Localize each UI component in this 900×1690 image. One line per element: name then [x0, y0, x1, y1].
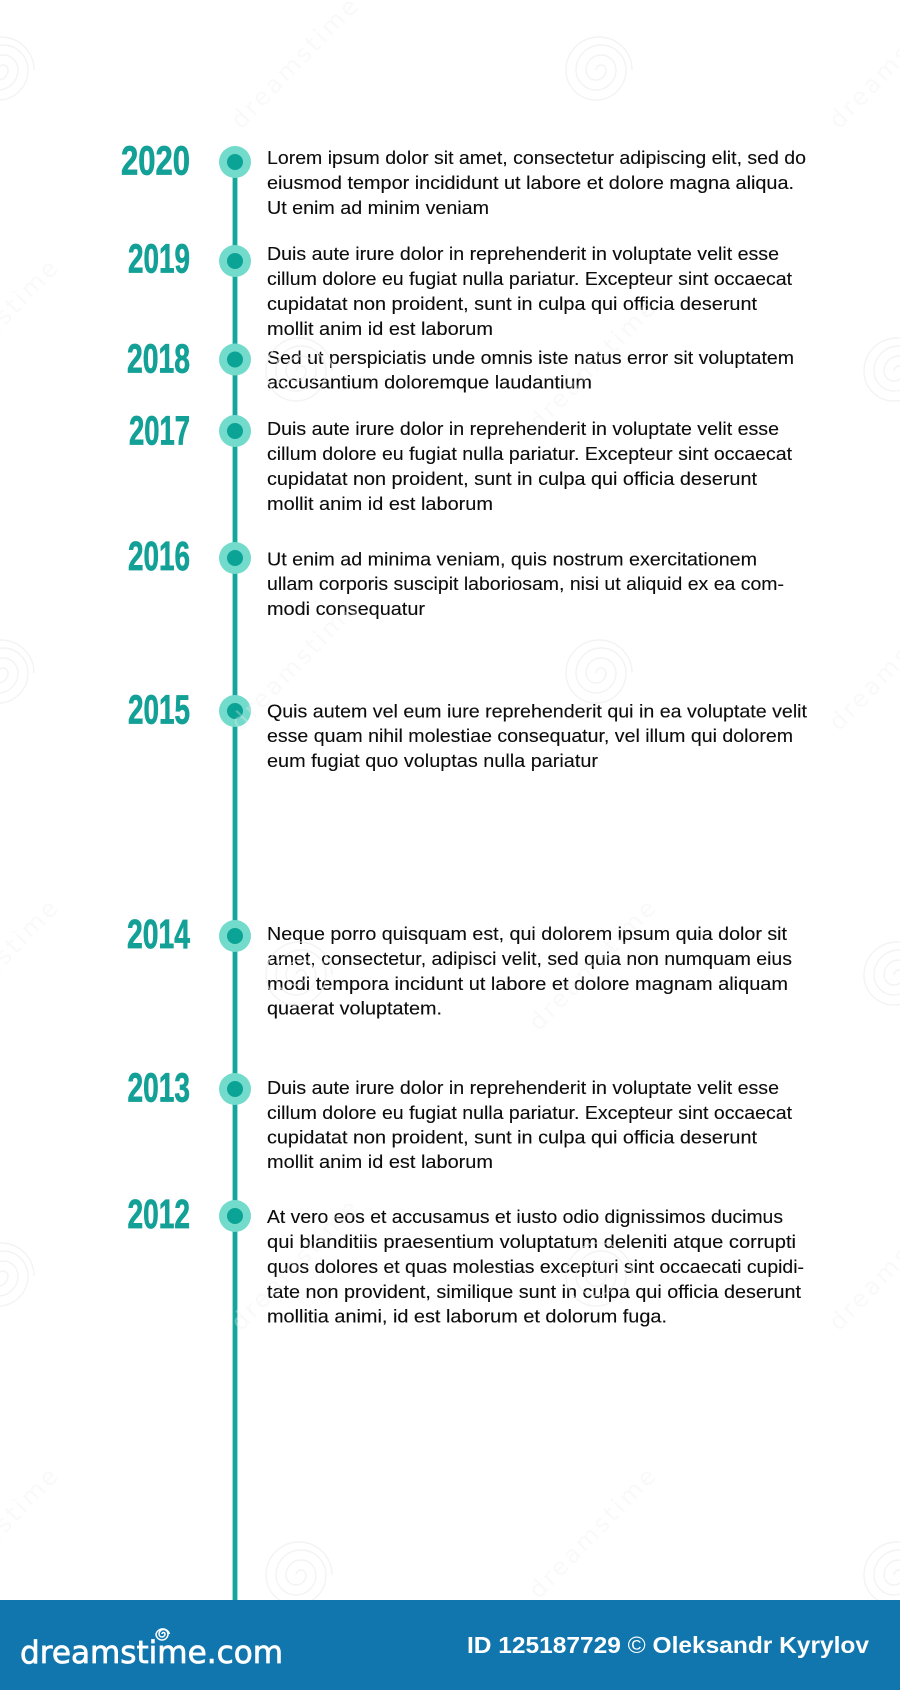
- footer logo: dreamstime.com: [20, 1635, 283, 1671]
- watermark overlay: dreamstime: [225, 594, 363, 736]
- entry: 2015: [128, 686, 807, 771]
- watermark overlay: dreamstime: [523, 294, 661, 436]
- description 2013: cillum dolore eu fugiat nulla pariatur. Excepteur sint occaecat: [267, 1102, 792, 1123]
- entry: 2014: [127, 911, 792, 1018]
- footer image id and author: ID 125187729 © Oleksandr Kyrylov: [467, 1632, 869, 1658]
- description 2014: amet, consectetur, adipisci velit, sed quia non numquam eius: [267, 948, 792, 969]
- marker 2017: [219, 415, 251, 447]
- year label 2020: 2020: [121, 138, 190, 184]
- description 2012: mollitia animi, id est laborum et dolorum fuga.: [267, 1306, 667, 1326]
- description 2014: [267, 923, 792, 1018]
- marker 2020: [219, 146, 251, 178]
- marker 2019: [219, 245, 251, 277]
- marker 2016: [219, 542, 251, 574]
- description 2018: Sed ut perspiciatis unde omnis iste natus error sit voluptatem: [267, 347, 794, 368]
- description 2020: Ut enim ad minim veniam: [267, 197, 489, 218]
- description 2019: cillum dolore eu fugiat nulla pariatur. Excepteur sint occaecat: [267, 268, 792, 289]
- year label 2014: 2014: [127, 911, 190, 957]
- description 2014: Neque porro quisquam est, qui dolorem ipsum quia dolor sit: [267, 923, 787, 944]
- year label 2016: 2016: [128, 533, 190, 579]
- description 2019: Duis aute irure dolor in reprehenderit in voluptate velit esse: [267, 243, 779, 264]
- description 2016: Ut enim ad minima veniam, quis nostrum exercitationem: [267, 548, 757, 570]
- description 2015: Quis autem vel eum iure reprehenderit qui in ea voluptate velit: [267, 700, 807, 722]
- year label 2017: 2017: [129, 408, 190, 454]
- footer bar: [0, 1600, 900, 1690]
- entry: 2016: [128, 533, 784, 619]
- description 2017: cupidatat non proident, sunt in culpa qui officia deserunt: [267, 468, 757, 489]
- year label 2019: 2019: [128, 236, 190, 282]
- description 2012: tate non provident, similique sunt in culpa qui officia deserunt: [267, 1281, 801, 1302]
- description 2015: [267, 700, 807, 771]
- description 2013: [267, 1077, 792, 1172]
- marker 2012: [219, 1200, 251, 1232]
- description 2012: [267, 1206, 804, 1326]
- watermark overlay: dreamstime: [523, 1462, 661, 1604]
- marker 2015: [219, 695, 251, 727]
- description 2020: eiusmod tempor incididunt ut labore et dolore magna aliqua.: [267, 172, 794, 193]
- year label 2015: 2015: [128, 686, 190, 732]
- description 2013: cupidatat non proident, sunt in culpa qui officia deserunt: [267, 1126, 757, 1148]
- description 2013: Duis aute irure dolor in reprehenderit in voluptate velit esse: [267, 1077, 779, 1098]
- year label 2013: 2013: [128, 1064, 190, 1110]
- entry: 2018: [127, 336, 794, 392]
- description 2018: accusantium doloremque laudantium: [267, 372, 592, 392]
- year label 2018: 2018: [127, 336, 190, 382]
- description 2016: ullam corporis suscipit laboriosam, nisi ut aliquid ex ea com-: [267, 573, 784, 594]
- watermark overlay: dreamstime: [523, 894, 661, 1036]
- description 2014: modi tempora incidunt ut labore et dolore magnam aliquam: [267, 973, 788, 994]
- entry: 2017: [129, 408, 792, 514]
- description 2016: [267, 548, 784, 619]
- entry: 2012: [128, 1191, 804, 1326]
- description 2019: mollit anim id est laborum: [267, 318, 493, 339]
- entry: 2019: [128, 236, 792, 339]
- entry: 2013: [128, 1064, 792, 1172]
- marker 2013: [219, 1073, 251, 1105]
- marker 2014: [219, 920, 251, 952]
- icon: logo spiral: [154, 1626, 170, 1642]
- description 2016: modi consequatur: [267, 598, 425, 619]
- description 2017: mollit anim id est laborum: [267, 493, 493, 514]
- description 2020: [267, 147, 806, 218]
- year label 2012: 2012: [128, 1191, 190, 1237]
- description 2020: Lorem ipsum dolor sit amet, consectetur adipiscing elit, sed do: [267, 147, 806, 168]
- marker 2018: [219, 344, 251, 376]
- description 2017: Duis aute irure dolor in reprehenderit in voluptate velit esse: [267, 418, 779, 439]
- description 2012: At vero eos et accusamus et iusto odio dignissimos ducimus: [267, 1206, 783, 1227]
- description 2012: qui blanditiis praesentium voluptatum deleniti atque corrupti: [267, 1231, 796, 1252]
- vertical timeline axis: [233, 162, 237, 1600]
- description 2019: cupidatat non proident, sunt in culpa qui officia deserunt: [267, 293, 757, 314]
- entry: 2020: [121, 138, 806, 218]
- description 2013: mollit anim id est laborum: [267, 1151, 493, 1172]
- description 2017: [267, 418, 792, 514]
- watermark overlay: dreamstime: [225, 1194, 363, 1336]
- description 2014: quaerat voluptatem.: [267, 998, 442, 1018]
- description 2015: eum fugiat quo voluptas nulla pariatur: [267, 750, 598, 771]
- description 2017: cillum dolore eu fugiat nulla pariatur. Excepteur sint occaecat: [267, 443, 792, 464]
- description 2018: [267, 347, 794, 392]
- description 2015: esse quam nihil molestiae consequatur, vel illum qui dolorem: [267, 725, 793, 746]
- description 2019: [267, 243, 792, 339]
- description 2012: quos dolores et quas molestias excepturi sint occaecati cupidi-: [267, 1256, 804, 1277]
